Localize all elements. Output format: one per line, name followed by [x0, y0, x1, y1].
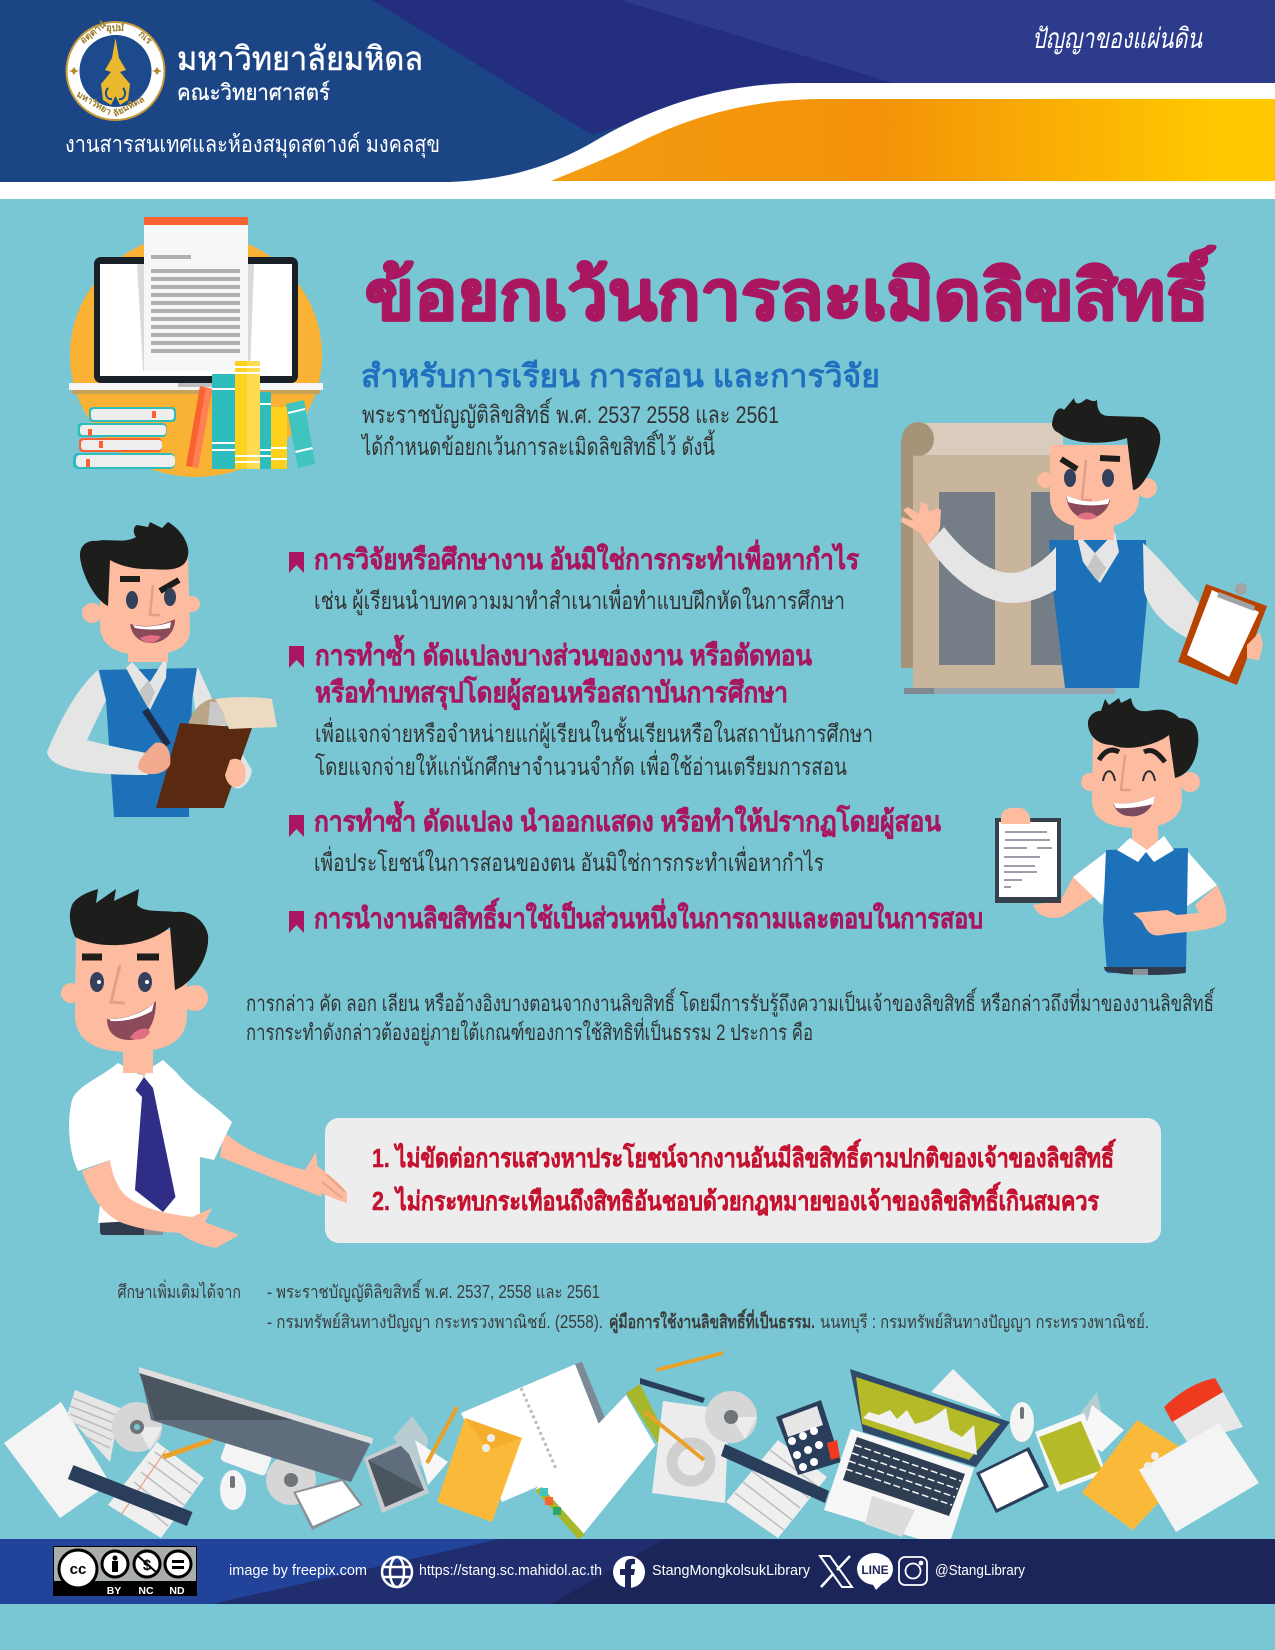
reference 2 authors: - กรมทรัพย์สินทางปัญญา กระทรวงพาณิชย์. (2558).	[267, 1312, 603, 1332]
reference 2 book title: คู่มือการใช้งานลิขสิทธิ์ที่เป็นธรรม.	[609, 1308, 815, 1334]
icon: globe	[382, 1557, 412, 1587]
item 2 heading line 1: การทำซ้ำ ดัดแปลงบางส่วนของงาน หรือตัดทอน	[315, 634, 812, 671]
social handle: @StangLibrary	[935, 1562, 1025, 1579]
item 1 heading: การวิจัยหรือศึกษางาน อันมิใช่การกระทำเพื่อหากำไร	[314, 539, 859, 575]
act description line 2: ได้กำหนดข้อยกเว้นการละเมิดลิขสิทธิ์ไว้ ดังนี้	[360, 429, 715, 461]
creative commons badge: BY	[107, 1585, 121, 1597]
creative commons badge	[53, 1546, 197, 1597]
university logo: อตฺตานํ	[78, 19, 109, 46]
library name: งานสารสนเทศและห้องสมุดสตางค์ มงคลสุข	[65, 131, 440, 158]
illustration: smiling student with paper	[995, 698, 1227, 975]
image credit: image by freepix.com	[229, 1562, 367, 1579]
condition 1: 1. ไม่ขัดต่อการแสวงหาประโยชน์จากงานอันมีลิขสิทธิ์ตามปกติของเจ้าของลิขสิทธิ์	[372, 1138, 1116, 1173]
icon: LINE: LINE	[861, 1563, 889, 1577]
item 4 heading: การนำงานลิขสิทธิ์มาใช้เป็นส่วนหนึ่งในการถามและตอบในการสอบ	[314, 898, 983, 934]
illustration: laptop and books	[69, 217, 323, 477]
university logo: มหาวิทยา	[75, 89, 113, 117]
creative commons badge: $	[143, 1557, 152, 1574]
creative commons badge: NC	[138, 1585, 154, 1597]
item marker 2	[289, 646, 304, 668]
callout: fair use conditions	[305, 1118, 1161, 1243]
item 1 detail: เช่น ผู้เรียนนำบทความมาทำสำเนาเพื่อทำแบบฝึกหัดในการศึกษา	[314, 584, 845, 616]
creative commons badge: cc	[70, 1561, 86, 1578]
reference 1: - พระราชบัญญัติลิขสิทธิ์ พ.ศ. 2537, 2558 และ 2561	[267, 1278, 600, 1302]
illustration: teacher with clipboard	[47, 522, 277, 817]
header banner	[0, 0, 1275, 199]
university logo: กเร	[136, 29, 154, 47]
icon: facebook	[613, 1556, 645, 1588]
creative commons badge: ND	[169, 1585, 185, 1597]
paragraph line 2: การกระทำดังกล่าวต้องอยู่ภายใต้เกณฑ์ของการใช้สิทธิที่เป็นธรรม 2 ประการ คือ	[246, 1017, 813, 1046]
website url: https://stang.sc.mahidol.ac.th	[419, 1562, 602, 1579]
illustration: teacher with board	[901, 398, 1267, 694]
item marker 3	[289, 815, 304, 837]
act description line 1: พระราชบัญญัติลิขสิทธิ์ พ.ศ. 2537 2558 และ 2561	[362, 397, 779, 429]
university name: มหาวิทยาลัยมหิดล	[177, 40, 423, 77]
item 2 detail line 1: เพื่อแจกจ่ายหรือจำหน่ายแก่ผู้เรียนในชั้นเรียนหรือในสถาบันการศึกษา	[315, 716, 873, 749]
condition 2: 2. ไม่กระทบกระเทือนถึงสิทธิอันชอบด้วยกฎหมายของเจ้าของลิขสิทธิ์เกินสมควร	[372, 1181, 1099, 1216]
university logo	[66, 19, 166, 121]
footer bar	[0, 1539, 1275, 1604]
item marker 4	[289, 911, 304, 933]
illustration: desk items right	[640, 1353, 1259, 1539]
item 2 detail line 2: โดยแจกจ่ายให้แก่นักศึกษาจำนวนจำกัด เพื่อใช้อ่านเตรียมการสอน	[315, 750, 847, 781]
item 3 detail: เพื่อประโยชน์ในการสอนของตน อันมิใช่การกระทำเพื่อหากำไร	[314, 846, 824, 877]
illustration: desk items left	[4, 1362, 668, 1539]
faculty name: คณะวิทยาศาสตร์	[177, 80, 330, 105]
icon: X	[820, 1556, 852, 1587]
item 3 heading: การทำซ้ำ ดัดแปลง นำออกแสดง หรือทำให้ปรากฏโดยผู้สอน	[314, 800, 941, 839]
main title: ข้อยกเว้นการละเมิดลิขสิทธิ์	[365, 245, 1216, 334]
further reading label: ศึกษาเพิ่มเติมได้จาก	[118, 1279, 241, 1302]
university logo: อุปมํ	[106, 22, 124, 34]
icon: LINE	[857, 1553, 893, 1590]
reference 2 publisher: นนทบุรี : กรมทรัพย์สินทางปัญญา กระทรวงพาณิชย์.	[820, 1312, 1149, 1333]
university logo: ลัยมหิดล	[111, 94, 146, 119]
subtitle: สำหรับการเรียน การสอน และการวิจัย	[361, 358, 880, 394]
icon: Instagram	[899, 1557, 927, 1585]
item marker 1	[289, 552, 304, 573]
item 2 heading line 2: หรือทำบทสรุปโดยผู้สอนหรือสถาบันการศึกษา	[315, 675, 788, 710]
slogan handwriting: ปัญญาของแผ่นดิน	[1032, 23, 1203, 55]
facebook name: StangMongkolsukLibrary	[652, 1562, 810, 1579]
illustration: student in white shirt and tie	[61, 889, 322, 1248]
